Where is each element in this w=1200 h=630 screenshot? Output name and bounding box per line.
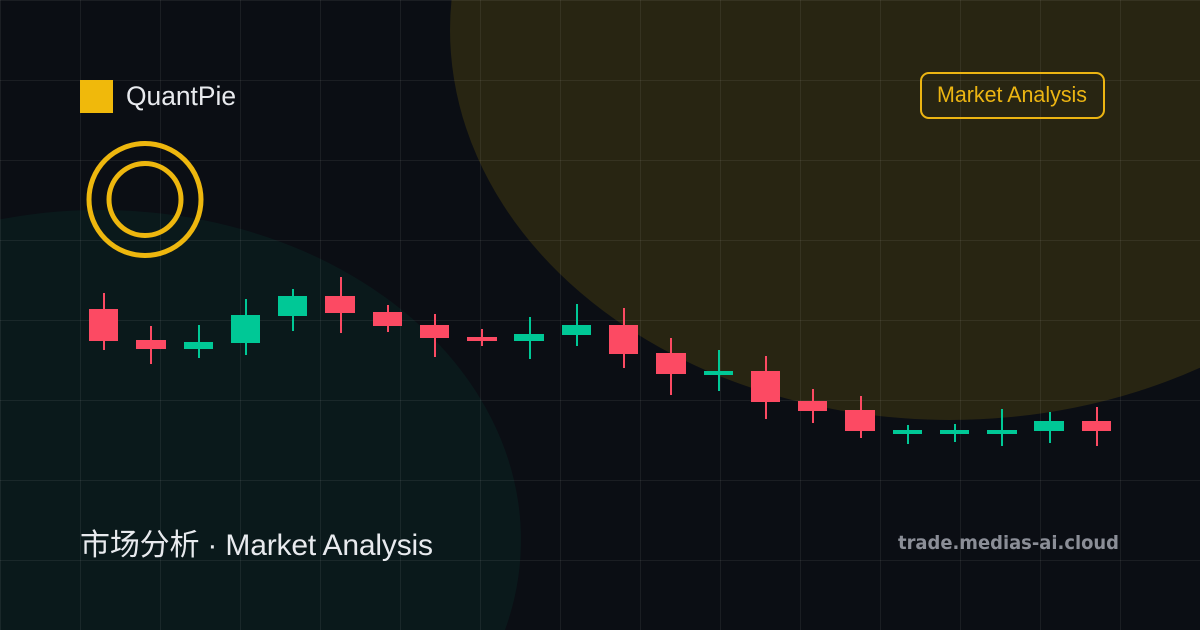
- candlestick chart: [89, 277, 1111, 446]
- icon: concentric gold rings: [89, 144, 201, 256]
- badge: Market Analysis: [921, 73, 1104, 118]
- brand name: QuantPie: [126, 81, 236, 111]
- title: 市场分析 · Market Analysis: [80, 529, 433, 562]
- teal background ellipse: [0, 210, 521, 630]
- brand logo: QuantPie: [80, 80, 236, 113]
- red candles: [89, 277, 1111, 446]
- gold background ellipse: [450, 0, 1200, 420]
- green candles: [184, 289, 1064, 446]
- footer URL: trade.medias-ai.cloud: [898, 532, 1119, 554]
- icon: gold square: [80, 80, 113, 113]
- badge label: Market Analysis: [937, 82, 1087, 107]
- badge outline: [921, 73, 1104, 118]
